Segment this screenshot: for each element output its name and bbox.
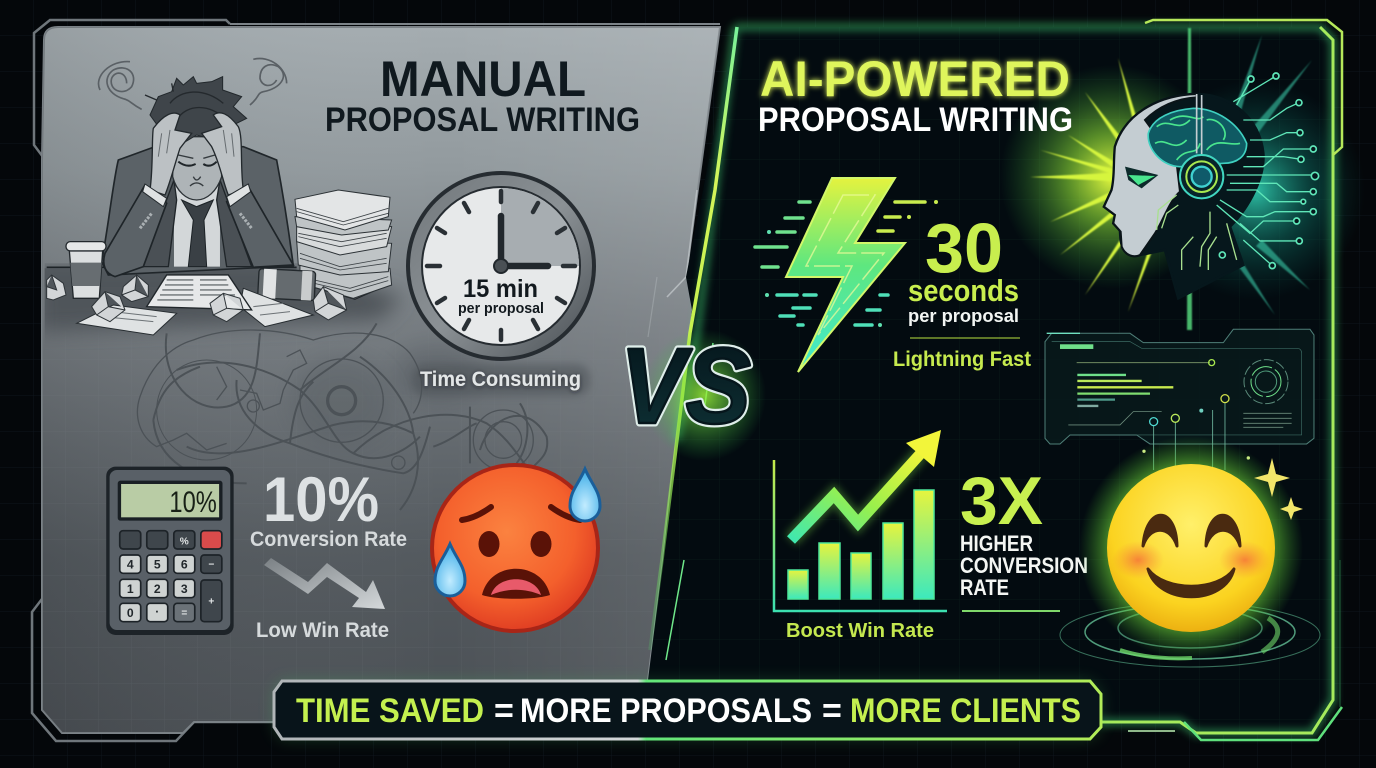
arrow: declining trend (264, 558, 385, 609)
shirt and tie (174, 183, 220, 267)
banner: time saved = more proposals = more clients (274, 681, 1101, 739)
panel: ai-powered proposal writing (640, 20, 1365, 740)
hands and sleeves (150, 113, 192, 195)
calculator showing 10%: 4 (127, 558, 134, 572)
banner: time saved = more proposals = more clients: TIME SAVED (296, 692, 484, 730)
jacket (102, 147, 293, 275)
panel: manual proposal writing (32, 20, 720, 741)
calculator showing 10% (106, 467, 234, 635)
calculator showing 10%: 6 (181, 558, 188, 572)
icon: sparkles (1254, 458, 1303, 520)
vs badge: VS (620, 325, 751, 446)
head shape (1104, 94, 1263, 298)
banner: time saved = more proposals = more clients: = (822, 692, 842, 730)
title: manual proposal writing (325, 51, 640, 139)
stat: 3x higher conversion rate: RATE (960, 575, 1009, 600)
coffee cup (69, 251, 103, 298)
panel background (42, 27, 720, 733)
paper stack (298, 280, 392, 299)
calculator showing 10%: 3 (181, 582, 188, 596)
icon: ai head with circuits (1104, 73, 1319, 298)
label: boost win rate: Boost Win Rate (786, 620, 934, 642)
calculator showing 10%: 1 (127, 582, 134, 596)
holographic rings (1060, 603, 1320, 667)
banner: time saved = more proposals = more clients: MORE CLIENTS (850, 692, 1081, 730)
stat: 30 seconds per proposal: seconds (908, 273, 1019, 308)
calculator showing 10%: 5 (154, 558, 161, 572)
illustration: stressed man at desk (37, 59, 403, 335)
clock: 15 min per proposal: 15 min (463, 275, 538, 303)
stat: 10% conversion rate: Conversion Rate (250, 528, 407, 551)
stat: 30 seconds per proposal: 30 (925, 209, 1003, 287)
stat: 3x higher conversion rate: 3X (960, 463, 1043, 539)
bar chart with rising arrow (774, 430, 947, 611)
document sheets (77, 305, 177, 335)
stat: 10% conversion rate: 10% (263, 465, 379, 535)
clock: 15 min per proposal: per proposal (458, 300, 544, 317)
silver face (1104, 94, 1197, 256)
head (173, 137, 222, 200)
stat: 30 seconds per proposal: per proposal (908, 306, 1019, 326)
clock: 15 min per proposal (406, 171, 596, 361)
calculator showing 10%: % (180, 536, 189, 547)
glow behind ai head (1000, 28, 1365, 330)
calculator showing 10%: − (208, 559, 214, 570)
panel background (640, 27, 1333, 733)
title: ai-powered proposal writing: AI-POWERED (760, 51, 1070, 107)
calculator showing 10%: 0 (127, 606, 134, 620)
illustration: tangled wires and gears (137, 323, 547, 510)
label: low win rate: Low Win Rate (256, 619, 389, 642)
calculator showing 10%: 2 (154, 582, 161, 596)
stat: 3x higher conversion rate: HIGHER (960, 531, 1033, 556)
fallen cup (258, 269, 316, 301)
calculator showing 10%: · (155, 605, 159, 619)
hair (150, 77, 247, 147)
crumpled paper balls (47, 275, 347, 322)
label: time consuming: Time Consuming (420, 368, 581, 391)
label: lightning fast: Lightning Fast (893, 348, 1031, 371)
icon: lightning bolt with speed lines (755, 178, 938, 372)
calculator showing 10%: = (181, 608, 187, 619)
title: ai-powered proposal writing (758, 51, 1073, 139)
stat: 3x higher conversion rate (960, 463, 1088, 611)
calculator showing 10%: 10% (169, 486, 217, 519)
panel frame: grey outer border (32, 20, 720, 741)
banner: time saved = more proposals = more clients: MORE PROPOSALS (520, 692, 812, 730)
stat: 30 seconds per proposal (908, 209, 1020, 338)
title: manual proposal writing: PROPOSAL WRITING (325, 101, 640, 139)
stat: 3x higher conversion rate: CONVERSION (960, 553, 1088, 578)
circuit traces (1157, 76, 1315, 270)
panel frame: green neon border (650, 20, 1342, 740)
rising arrow (791, 452, 922, 540)
title: manual proposal writing: MANUAL (380, 51, 586, 107)
icon: sweat drops (435, 469, 600, 596)
icon: worried red emoji (430, 463, 600, 633)
dashboard ui hologram (1045, 329, 1314, 470)
icon: smiling emoji (1079, 436, 1303, 660)
stat: 10% conversion rate (250, 465, 407, 551)
stress spirals (99, 59, 287, 109)
brain (1148, 108, 1247, 167)
calculator showing 10%: + (208, 597, 214, 608)
vs badge: VS (620, 325, 751, 446)
ear ring (1180, 155, 1223, 198)
title: ai-powered proposal writing: PROPOSAL WRITING (758, 101, 1073, 139)
label: time consuming (412, 364, 590, 396)
desk (37, 268, 403, 332)
banner: time saved = more proposals = more clients: = (494, 692, 514, 730)
